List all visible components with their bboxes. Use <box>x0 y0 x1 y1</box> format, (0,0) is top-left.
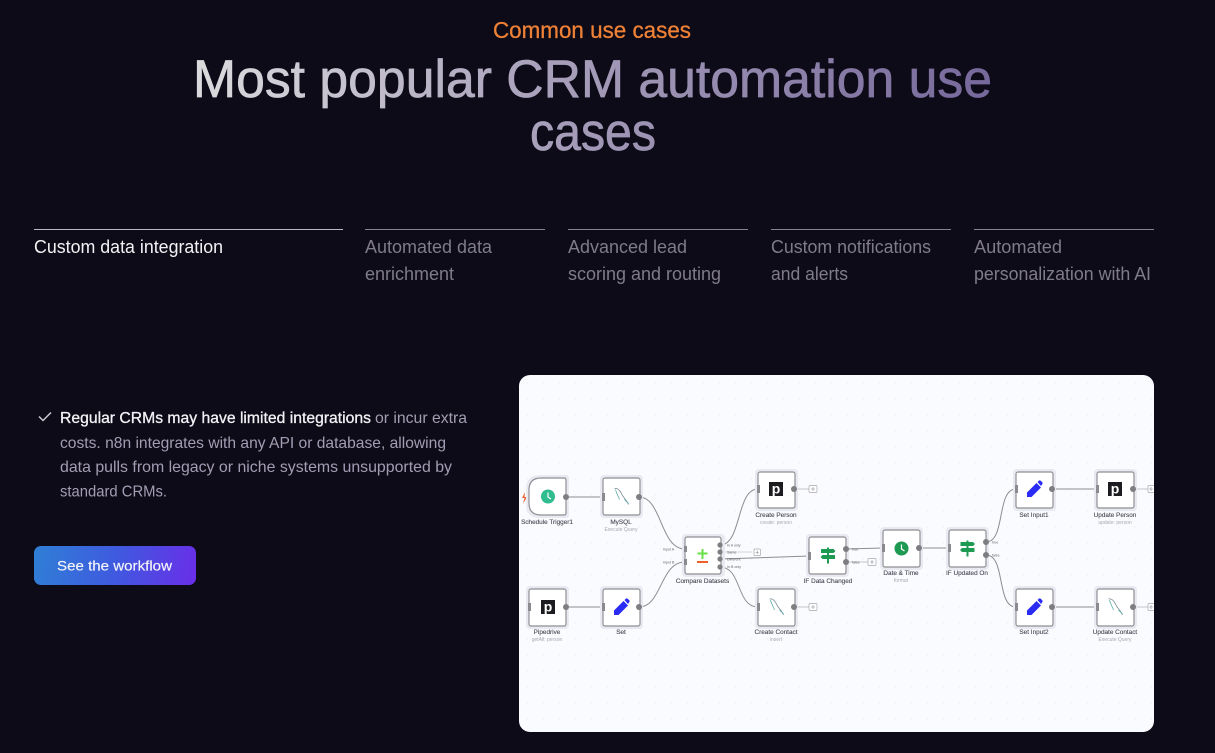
tab: custom notifications and alerts: Custom notifications <box>771 237 931 257</box>
description text: Regular CRMs may have limited integrations <box>60 410 371 427</box>
node: set input2 <box>1013 586 1056 636</box>
description text <box>60 410 467 500</box>
node: create contact: insert <box>770 637 783 643</box>
node: update contact: Update Contact <box>1093 629 1137 636</box>
node: update person: p <box>1111 480 1119 496</box>
node: compare datasets: In A only <box>727 544 741 548</box>
title: Most popular CRM automation use <box>193 50 992 109</box>
node: compare datasets: Different <box>727 558 741 562</box>
node: mysql: MySQL <box>610 519 632 526</box>
node: update person: Update Person <box>1094 512 1137 519</box>
tab: automated data enrichment: enrichment <box>365 264 454 284</box>
node: create person: Create Person <box>755 512 797 519</box>
tab: advanced lead scoring and routing: Advanced lead <box>568 237 687 257</box>
node: compare datasets: In B only <box>727 565 741 569</box>
description text: or incur extra <box>375 410 467 427</box>
icon: check mark <box>39 412 51 420</box>
tab: automated personalization with AI: Automated <box>974 237 1062 257</box>
node: if updated on: IF Updated On <box>946 570 988 577</box>
connectors <box>566 489 1148 607</box>
node: date and time <box>880 527 923 584</box>
node: pipedrive: Pipedrive <box>534 629 561 636</box>
node: compare datasets: Same <box>727 550 736 554</box>
node: schedule trigger: Schedule Trigger1 <box>521 519 573 526</box>
title <box>193 50 992 162</box>
node: mysql: Execute Query <box>604 527 638 533</box>
node: if updated on: false <box>992 554 1000 558</box>
icon: trigger bolt <box>522 492 526 504</box>
description text: costs. n8n integrates with any API or database, allowing <box>60 435 446 452</box>
description text: standard CRMs. <box>60 484 167 500</box>
tab: automated personalization with AI: personalization with AI <box>974 264 1151 284</box>
node: if data changed: true <box>852 548 858 552</box>
node: compare datasets: Compare Datasets <box>676 578 729 585</box>
node: create person: create: person <box>760 520 792 526</box>
eyebrow: common use cases: Common use cases <box>493 17 691 43</box>
node: pipedrive: p <box>544 598 552 614</box>
tab: automated data enrichment: Automated data <box>365 237 493 257</box>
title: cases <box>530 103 656 162</box>
tab: automated personalization with AI <box>974 229 1154 284</box>
node: pipedrive <box>526 586 569 643</box>
node: compare datasets: Input A <box>663 548 675 552</box>
node: compare datasets <box>663 534 741 585</box>
node: if updated on: true <box>992 540 998 544</box>
tab: advanced lead scoring and routing <box>568 229 748 284</box>
node: set input1 <box>1013 469 1056 519</box>
node: set <box>600 586 643 636</box>
node: mysql <box>600 475 643 533</box>
node: update person: update: person <box>1098 520 1132 526</box>
node: update contact <box>1093 586 1156 643</box>
node: create contact <box>755 586 817 643</box>
node: update contact: Execute Query <box>1098 637 1132 643</box>
tab: automated data enrichment <box>365 229 545 284</box>
node: date and time: Date & Time <box>883 570 919 577</box>
node: if data changed: false <box>852 560 860 564</box>
node: update person <box>1094 469 1156 526</box>
node: create contact: Create Contact <box>755 629 798 636</box>
tab: custom notifications and alerts: and alerts <box>771 264 848 284</box>
node: set input2: Set Input2 <box>1019 629 1049 636</box>
node: create person: p <box>772 480 780 496</box>
tab: advanced lead scoring and routing: scoring and routing <box>568 264 721 284</box>
description text: data pulls from legacy or niche systems unsupported by <box>60 459 452 476</box>
tab: custom notifications and alerts <box>771 229 951 284</box>
node: date and time: format <box>894 578 909 584</box>
node: set: Set <box>616 629 626 636</box>
button: see the workflow <box>34 546 196 585</box>
node: schedule trigger <box>521 475 573 526</box>
button: see the workflow: See the workflow <box>57 558 172 574</box>
plus button: same <box>754 549 760 556</box>
node: create person <box>755 469 817 526</box>
panel: workflow diagram <box>519 375 1156 732</box>
node: pipedrive: getAll: person <box>532 637 563 643</box>
node: if updated on <box>946 527 1000 577</box>
node: if data changed <box>804 534 876 585</box>
node: set input1: Set Input1 <box>1019 512 1049 519</box>
tabs <box>34 229 1154 284</box>
node: compare datasets: Input B <box>663 560 675 564</box>
node: if data changed: IF Data Changed <box>804 578 853 585</box>
tab: custom data integration: Custom data integration <box>34 237 223 257</box>
